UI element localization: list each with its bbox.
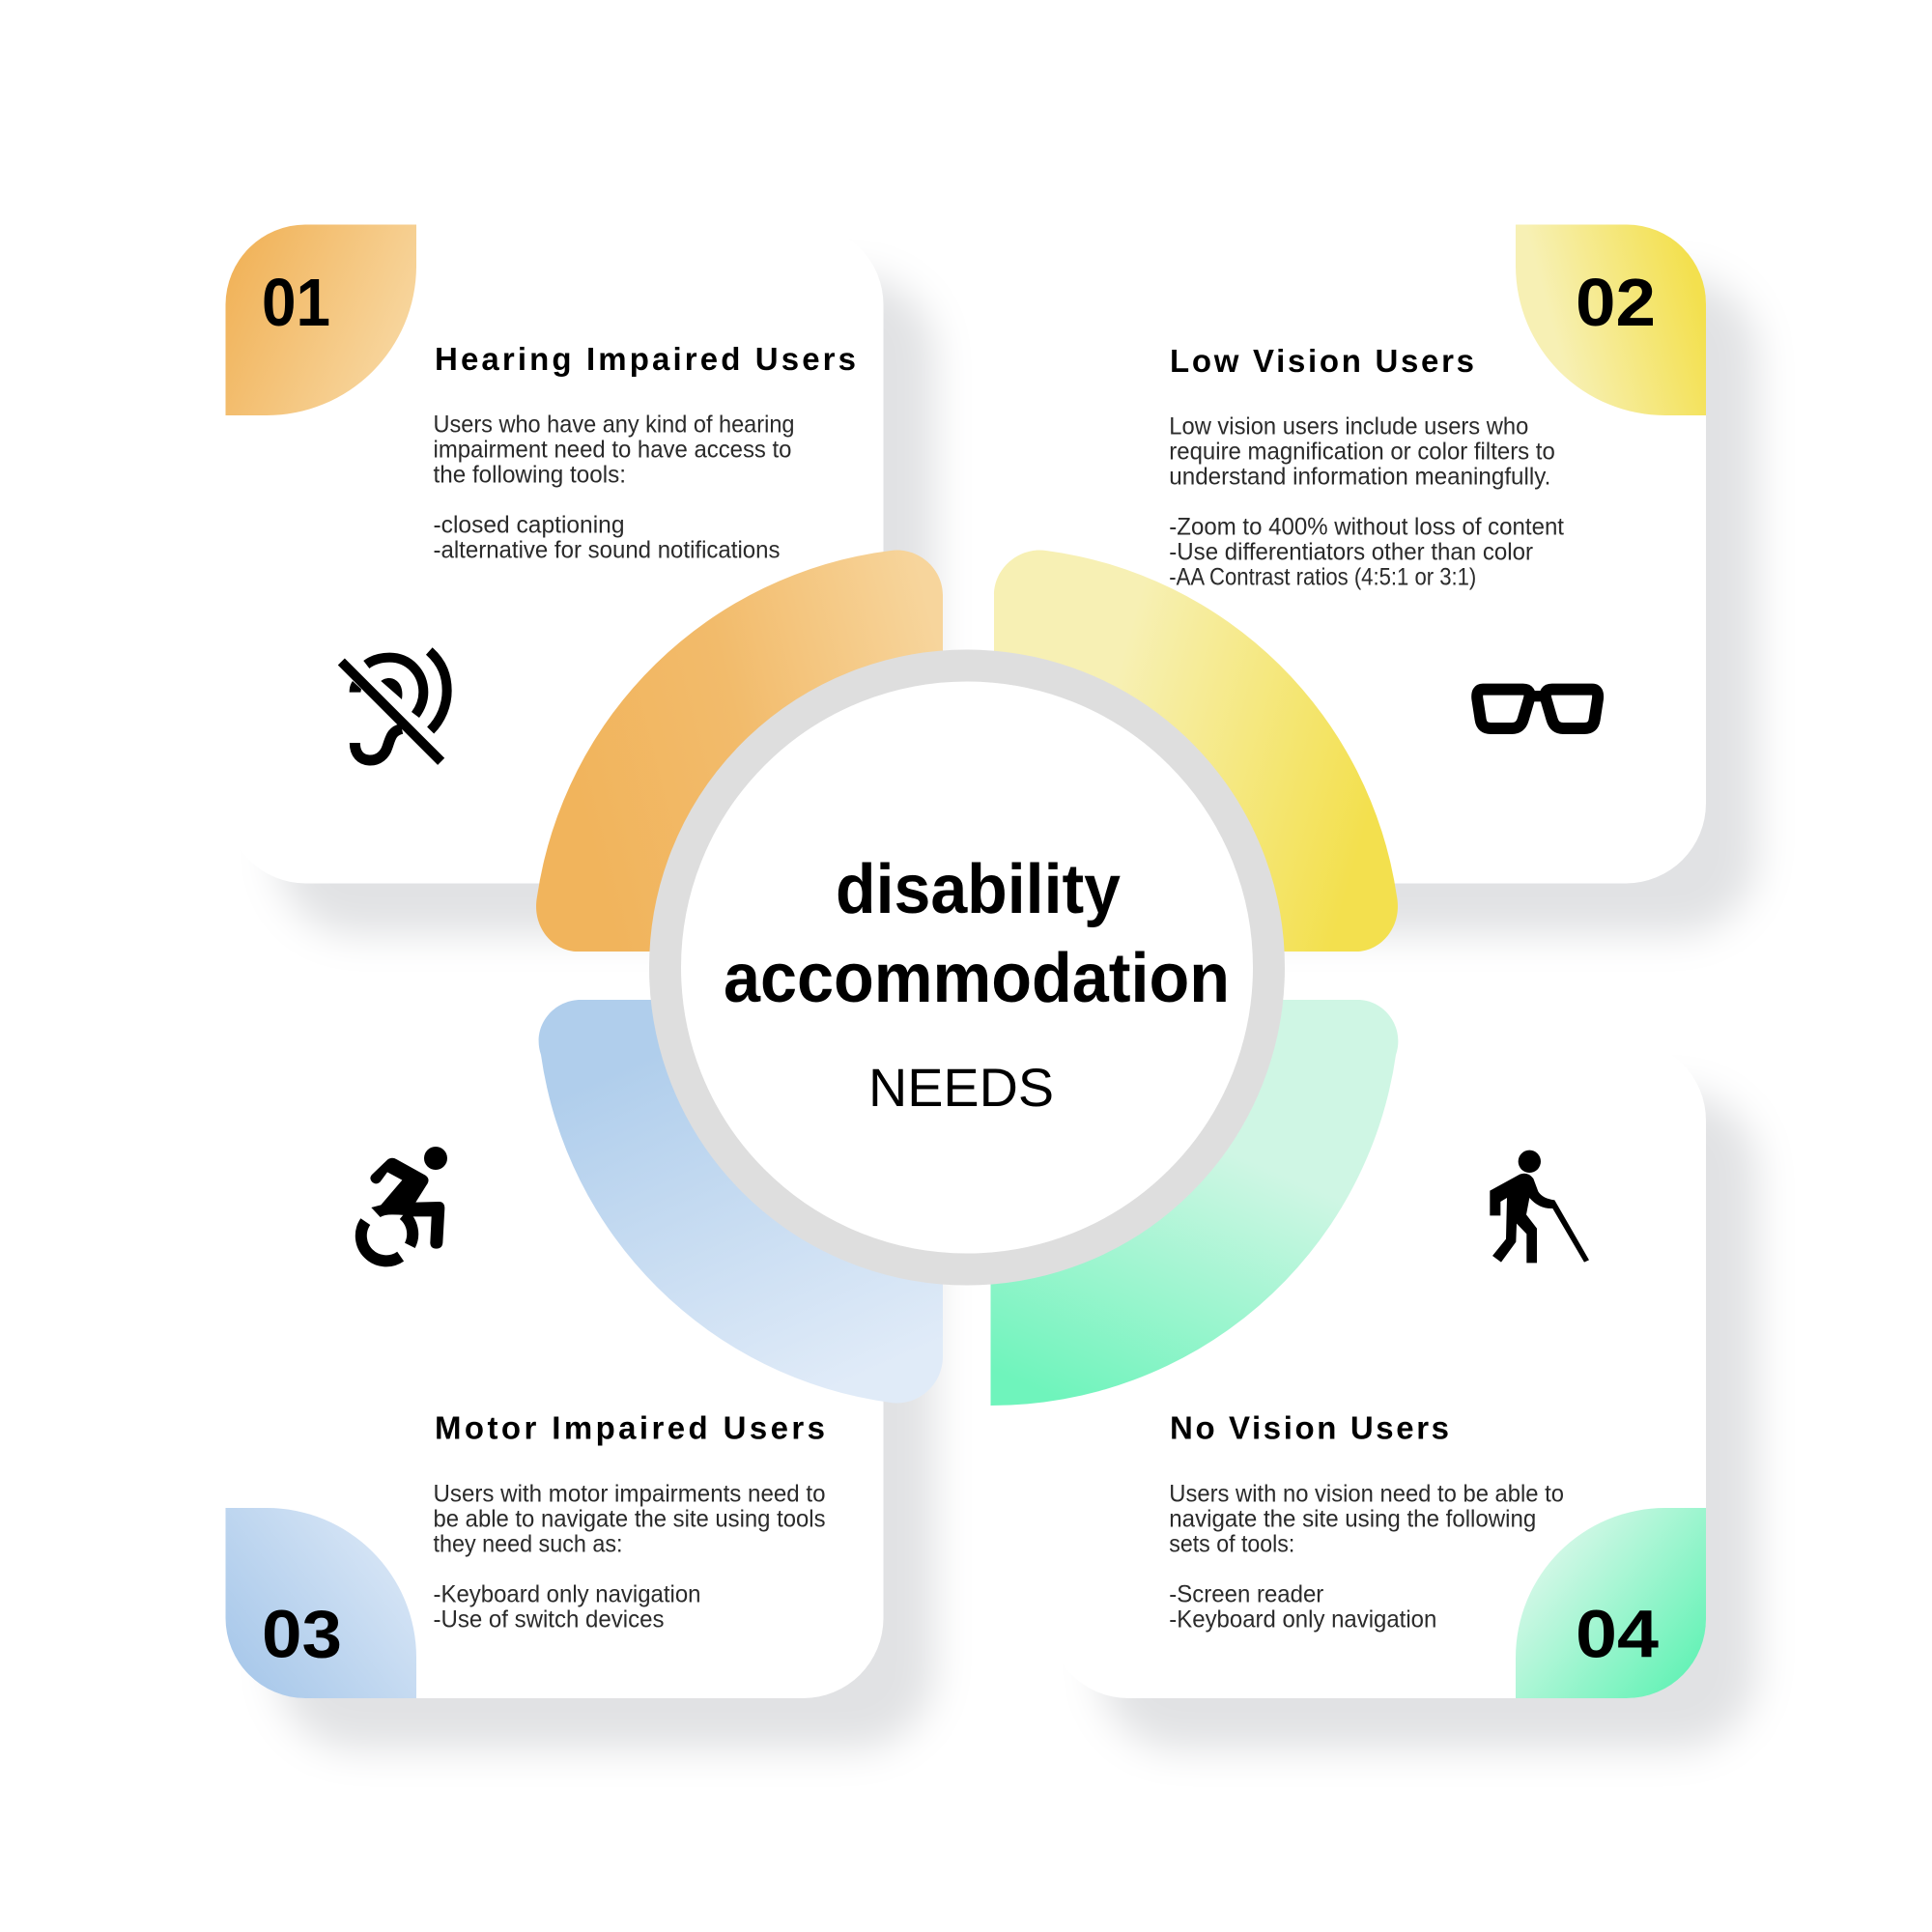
arc segment: yellow — [994, 551, 1398, 952]
text block: motor impaired — [433, 1480, 825, 1633]
text block: hearing impaired: the following tools: — [433, 462, 626, 489]
text block: low vision: -AA Contrast ratios (4:5:1 or 3:1) — [1169, 564, 1476, 591]
text block: no vision: -Screen reader — [1169, 1580, 1323, 1607]
text block: motor impaired: Users with motor impairments need to — [433, 1480, 825, 1507]
icon: glasses — [1477, 690, 1598, 728]
center title — [724, 851, 1230, 1118]
number tab 04 — [1516, 1508, 1706, 1698]
icon: hearing impaired ear with slash — [341, 651, 447, 761]
icon: person walking with cane — [1490, 1151, 1589, 1263]
icon: accessible wheelchair — [361, 1147, 447, 1261]
panel: hearing impaired card background — [226, 224, 883, 883]
arc segment: blue — [539, 1000, 943, 1403]
text block: low vision: -Use differentiators other than color — [1169, 539, 1533, 566]
center circle with grey ring — [665, 666, 1269, 1269]
text block: low vision: understand information meaningfully. — [1169, 464, 1550, 491]
text block: low vision — [1169, 413, 1564, 591]
text block: no vision — [1169, 1480, 1564, 1633]
panel: motor impaired card background — [226, 1040, 883, 1698]
text block: low vision: Low vision users include users who — [1169, 413, 1528, 440]
text block: hearing impaired — [433, 412, 794, 564]
text block: no vision: sets of tools: — [1169, 1530, 1294, 1557]
text block: no vision: Users with no vision need to be able to — [1169, 1480, 1564, 1507]
panel: no vision card background — [1048, 1040, 1706, 1698]
heading: low vision users: Low Vision Users — [1170, 343, 1474, 379]
text block: hearing impaired: impairment need to have access to — [433, 437, 792, 464]
text block: hearing impaired: -alternative for sound notifications — [433, 537, 781, 564]
arc segment: orange — [536, 551, 943, 952]
heading: no vision users: No Vision Users — [1170, 1410, 1449, 1445]
text block: low vision: require magnification or color filters to — [1169, 439, 1555, 466]
text block: no vision: -Keyboard only navigation — [1169, 1605, 1436, 1633]
heading: hearing impaired users: Hearing Impaired Users — [435, 341, 856, 377]
number tab 04: 04 — [1576, 1596, 1659, 1671]
center title: disability — [836, 851, 1121, 928]
text block: motor impaired: be able to navigate the site using tools — [433, 1505, 825, 1532]
text block: hearing impaired: -closed captioning — [433, 512, 624, 539]
text block: motor impaired: -Keyboard only navigation — [433, 1580, 701, 1607]
text block: low vision: -Zoom to 400% without loss of content — [1169, 514, 1564, 541]
number tab 03: 03 — [262, 1596, 342, 1671]
center title: NEEDS — [868, 1057, 1054, 1118]
panel: low vision card background — [1048, 224, 1706, 883]
number tab 03 — [226, 1508, 416, 1698]
arc segment: green — [991, 1000, 1398, 1406]
number tab 02 — [1516, 224, 1706, 415]
text block: no vision: navigate the site using the following — [1169, 1505, 1536, 1532]
number tab 01: 01 — [262, 265, 330, 340]
text block: hearing impaired: Users who have any kind of hearing — [433, 412, 794, 439]
text block: motor impaired: they need such as: — [433, 1530, 622, 1557]
center title: accommodation — [724, 940, 1230, 1017]
heading: motor impaired users: Motor Impaired Users — [435, 1410, 825, 1445]
number tab 02: 02 — [1576, 265, 1656, 340]
number tab 01 — [226, 224, 416, 415]
text block: motor impaired: -Use of switch devices — [433, 1605, 665, 1633]
